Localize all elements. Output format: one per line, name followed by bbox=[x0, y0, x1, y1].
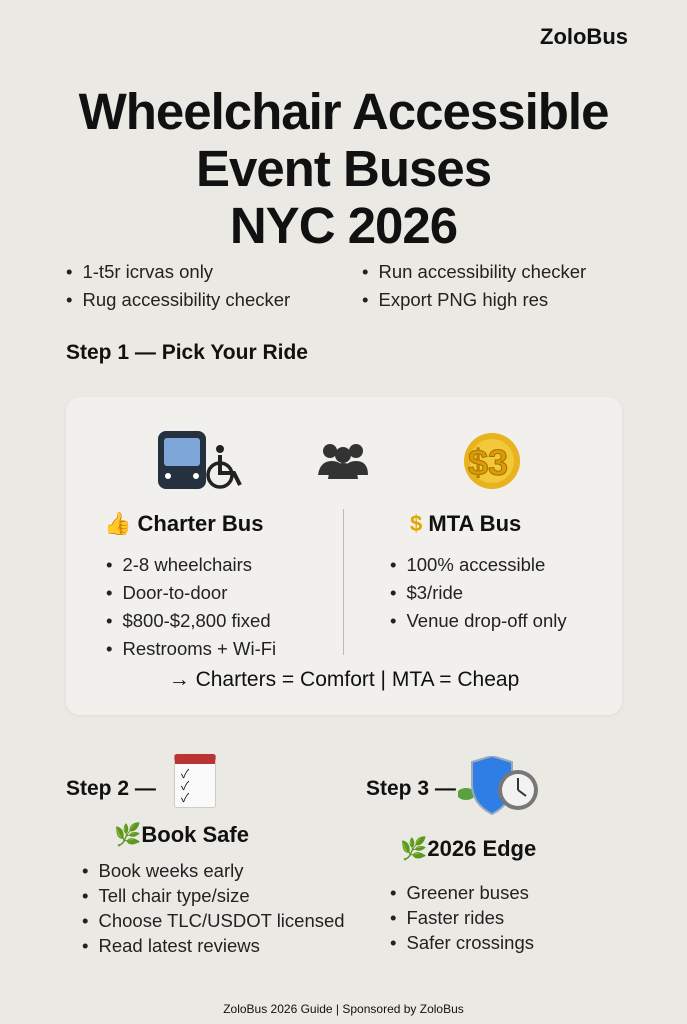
icon: checklist bbox=[174, 754, 216, 808]
list: charter bbox=[106, 554, 276, 659]
list: charter: 2-8 wheelchairs bbox=[122, 554, 252, 575]
list: book safe: Choose TLC/USDOT licensed bbox=[98, 910, 345, 931]
title: NYC 2026 bbox=[230, 197, 457, 254]
list: book safe bbox=[82, 860, 345, 956]
icon: $3 coin: $3 bbox=[468, 442, 508, 483]
heading: charter bus: 👍 Charter Bus bbox=[104, 511, 263, 536]
list: charter: $800-$2,800 fixed bbox=[122, 610, 271, 631]
list: MTA: 100% accessible bbox=[406, 554, 545, 575]
list: edge: Greener buses bbox=[406, 882, 529, 903]
step 1 heading: Step 1 — Pick Your Ride bbox=[66, 341, 308, 364]
title: Event Buses bbox=[196, 140, 491, 197]
icon: shield clock bbox=[458, 756, 538, 815]
list: book safe: Book weeks early bbox=[98, 860, 243, 881]
brand: ZoloBus bbox=[540, 24, 628, 49]
bullet list: left bbox=[66, 261, 290, 310]
list: charter: Restrooms + Wi-Fi bbox=[122, 638, 276, 659]
summary: → Charters = Comfort | MTA = Cheap bbox=[169, 668, 519, 691]
list: edge bbox=[390, 882, 534, 953]
list: MTA: $3/ride bbox=[406, 582, 463, 603]
title bbox=[78, 83, 608, 254]
subheading: book safe: 🌿Book Safe bbox=[114, 822, 249, 847]
icon: checklist: ✓ bbox=[181, 791, 189, 805]
icon: bus wheelchair bbox=[158, 431, 242, 489]
list: edge: Faster rides bbox=[406, 907, 504, 928]
list: edge: Safer crossings bbox=[406, 932, 534, 953]
bullet list: left: 1-t5r icrvas only bbox=[82, 261, 213, 282]
icon: checklist: ✓ bbox=[181, 767, 189, 781]
list: book safe: Read latest reviews bbox=[98, 935, 260, 956]
step 2 bbox=[66, 754, 345, 956]
bullet list: right bbox=[362, 261, 586, 310]
footer: ZoloBus 2026 Guide | Sponsored by ZoloBus bbox=[223, 1002, 464, 1016]
divider bbox=[343, 509, 344, 655]
icon: checklist: ✓ bbox=[181, 779, 189, 793]
list: MTA: Venue drop-off only bbox=[406, 610, 567, 631]
title: Wheelchair Accessible bbox=[79, 83, 608, 140]
icon: people bbox=[318, 444, 368, 479]
list: book safe: Tell chair type/size bbox=[98, 885, 250, 906]
step 3 heading: Step 3 — bbox=[366, 777, 456, 800]
list: MTA bbox=[390, 554, 567, 631]
icon: $3 coin bbox=[464, 433, 520, 489]
bullet list: left: Rug accessibility checker bbox=[82, 289, 290, 310]
panel: compare bbox=[66, 397, 622, 715]
step 2 heading: Step 2 — bbox=[66, 777, 156, 800]
bullet list: right: Run accessibility checker bbox=[378, 261, 586, 282]
step 3 bbox=[366, 756, 538, 953]
list: charter: Door-to-door bbox=[122, 582, 227, 603]
subheading: 2026 edge: 🌿2026 Edge bbox=[400, 836, 536, 861]
bullet list: right: Export PNG high res bbox=[378, 289, 548, 310]
heading: MTA bus: $ MTA Bus bbox=[410, 511, 521, 536]
